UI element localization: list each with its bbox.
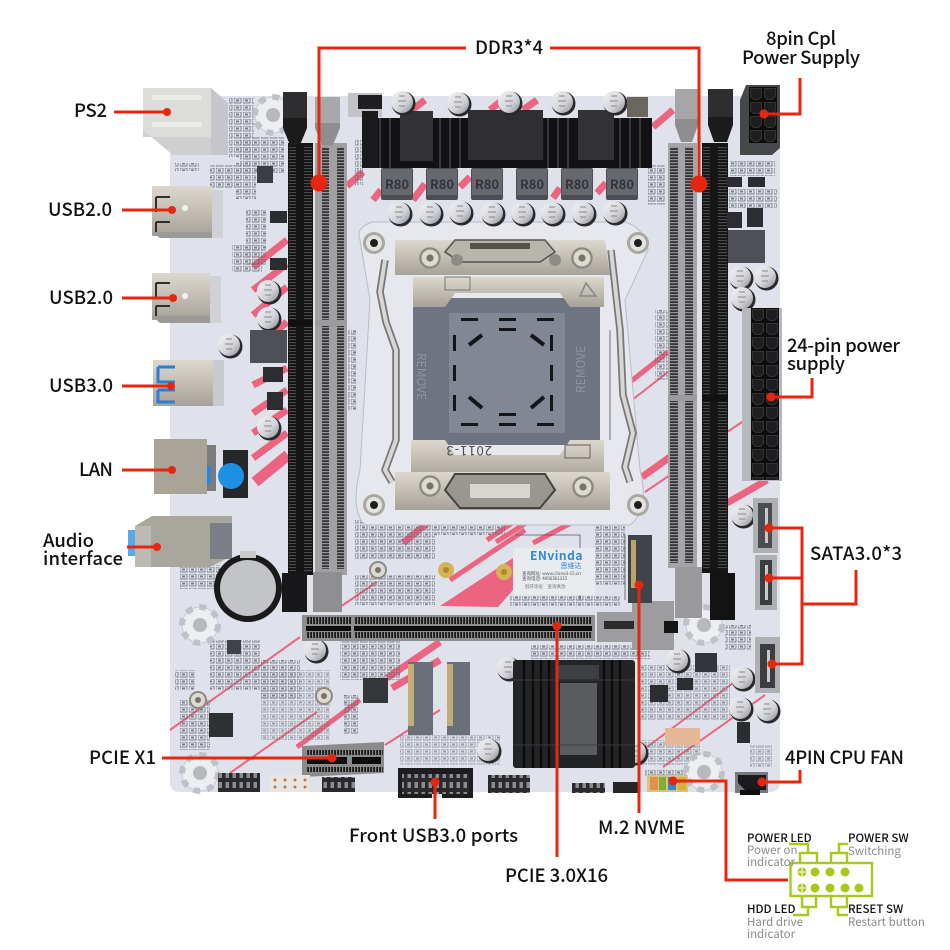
pink board stripes [170,100,767,773]
warranty sticker: 恩维达 [560,561,582,571]
callout: USB3.0 [49,372,175,398]
callout: Audio interface [43,527,161,571]
pin labels: Hard drive [747,914,803,930]
warranty sticker: ENvinda [530,547,583,564]
callout: USB2.0 lower [49,284,177,310]
callout: PS2: PS2 [74,97,107,123]
callout: Audio interface: Audio [43,527,94,553]
front USB3 header [398,768,473,798]
front panel pin diagram [668,776,925,942]
callout: USB3.0: USB3.0 [49,372,113,398]
RAM slot left grey [313,97,347,612]
top bracket [395,240,610,275]
8-pin CPU power connector [740,85,780,155]
callout: 4PIN CPU FAN: 4PIN CPU FAN [785,744,904,770]
panel: rear I/O ports [128,88,232,567]
callout: USB2.0 upper: USB2.0 [48,196,112,222]
RAM slot left black [282,92,313,612]
R80 inductors row: R80 [475,174,499,193]
motherboard [128,85,782,798]
callout: 4PIN CPU FAN [758,744,904,786]
RAM slot right black [702,89,735,620]
callout: LAN: LAN [79,456,113,482]
load plate lower: 2011-3 [445,442,492,461]
4-pin CPU fan header [735,772,768,795]
socket levers [380,250,633,482]
load plate upper [413,277,604,307]
USB3.0 port [153,360,224,406]
callout: DDR3*4: DDR3*4 [475,34,543,60]
warranty sticker: 查询网址: www.china3-15.cn [522,570,581,577]
USB2.0 port lower [152,273,221,323]
callout: 8pin CPU power: Power Supply [742,44,860,70]
callout: PCIE X1 [89,744,336,770]
callout: Audio interface: interface [43,545,123,571]
warranty sticker [513,547,595,595]
callout: LAN [79,456,176,482]
R80 inductors row [381,168,638,200]
small headers along bottom edge [218,773,638,793]
pin labels: Switching [848,843,901,859]
M.2 NVME slot [628,535,652,603]
24-pin power connector [742,308,782,481]
chipset heatsink [513,660,635,768]
RAM slot right grey [668,89,702,618]
silkscreen and small components [175,97,777,776]
LAN port [154,439,216,494]
pin labels: POWER LED [747,830,812,846]
R80 inductors row: R80 [565,174,589,193]
PCIe x16 slot [302,601,678,650]
R80 inductors row: R80 [520,174,544,193]
warranty sticker: 查询电话: 4006361315 [522,575,568,582]
callout: SATA3.0*3: SATA3.0*3 [810,540,902,566]
R80 inductors row: R80 [385,174,409,193]
callout: SATA3.0*3 [764,524,902,668]
USB2.0 port upper [152,186,223,238]
callout: DDR3*4 [310,34,708,192]
socket body: REMOVE [572,346,589,393]
header: system fan [348,93,382,117]
VRM heatsinks [362,110,652,168]
callout: 24-pin power supply [766,332,900,402]
pin labels: indicator [747,926,796,942]
callout: 8pin CPU power: 8pin Cpl [766,25,836,51]
pin labels: indicator [747,854,796,870]
pin header schematic [789,844,872,915]
callout: M.2 NVME [598,580,685,840]
M.2 slots [408,662,470,735]
callout: USB2.0 lower: USB2.0 [49,284,113,310]
socket body: REMOVE [413,353,430,400]
pin labels: POWER SW [848,830,909,846]
callout: PCIE 3.0X16 [505,622,608,888]
R80 inductors row: R80 [430,174,454,193]
R80 inductors row: R80 [610,174,634,193]
load plate lower [411,440,604,478]
callout: Front USB3.0 ports: Front USB3.0 ports [349,822,518,848]
pink patch under sticker [440,558,513,607]
callout: PCIE 3.0X16: PCIE 3.0X16 [505,862,608,888]
pin labels: RESET SW [848,901,903,917]
callout: 24-pin power supply: supply [787,350,845,376]
CPU socket bracket [363,232,649,516]
bottom bracket [395,472,610,510]
front panel header coloured [647,775,688,792]
pin labels: HDD LED [747,901,796,917]
callout: Front USB3.0 ports [349,778,518,848]
callout: 8pin CPU power [742,25,860,118]
PS2 port [143,88,228,155]
PCIe x1 slot [302,742,384,777]
SATA ports [753,498,780,693]
mounting holes and screws [182,97,722,791]
pin labels: Restart button [848,914,925,930]
pin labels: Power on [747,842,797,858]
coin battery [214,551,282,622]
callout: M.2 NVME: M.2 NVME [598,814,685,840]
callout: 24-pin power supply: 24-pin power [787,332,900,358]
callout: USB2.0 upper [48,196,176,222]
pin labels [747,830,925,942]
audio jack [128,516,232,567]
warranty sticker: 刮开涂层 查询真伪 [525,583,566,590]
socket body [413,298,600,445]
chips and chokes [209,166,765,745]
callout: PS2 [74,97,171,123]
capacitors [218,91,780,766]
callout: PCIE X1: PCIE X1 [89,744,156,770]
